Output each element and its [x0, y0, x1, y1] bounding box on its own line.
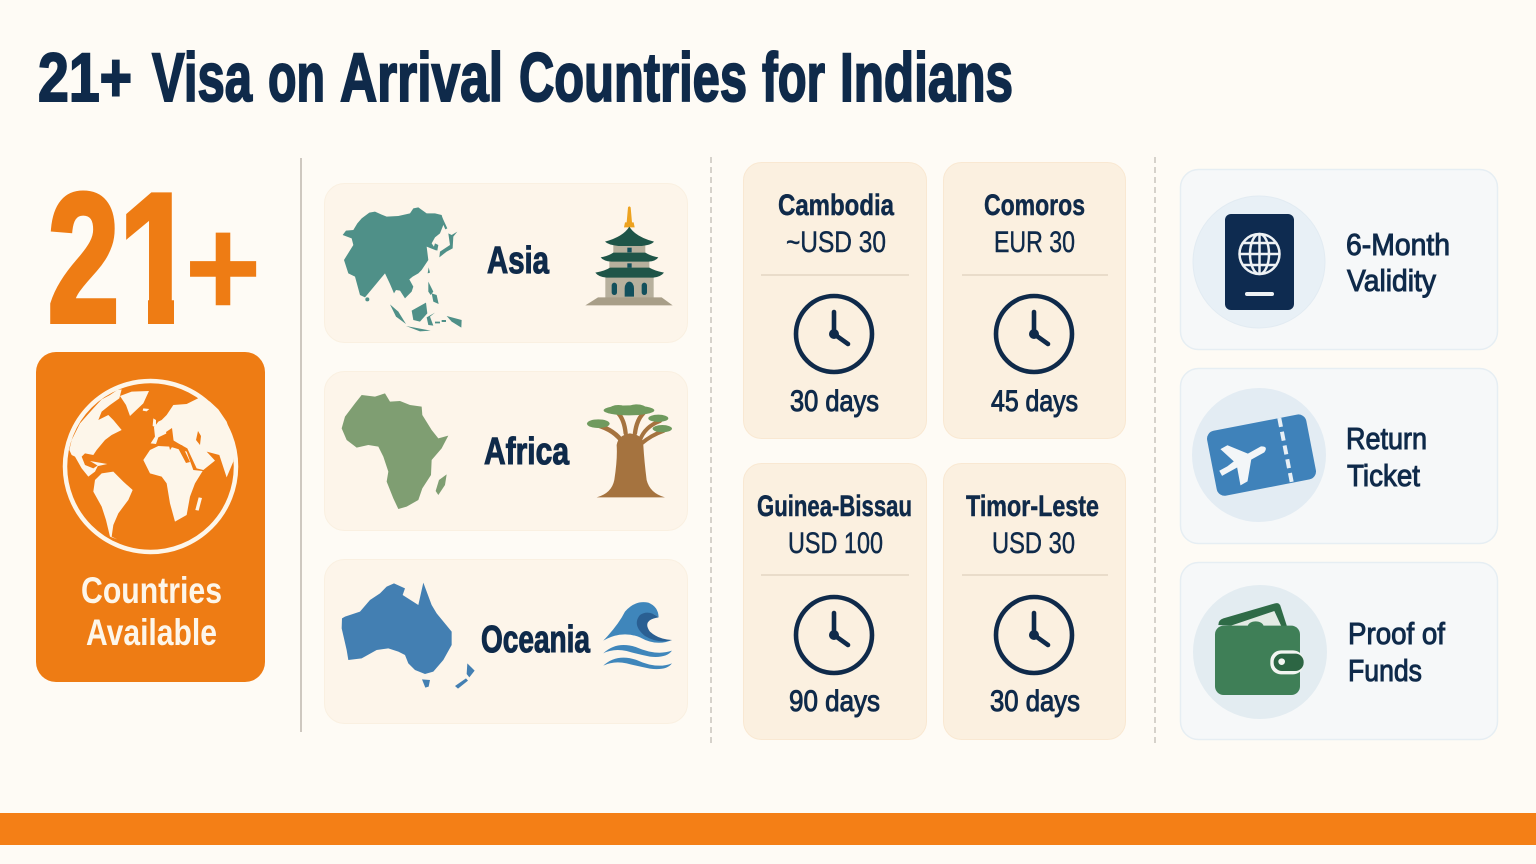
icon: baobab tree: [587, 404, 672, 497]
icon: plane ticket: [1206, 413, 1317, 497]
title: 21+: [38, 39, 132, 116]
title: Visa: [152, 39, 252, 116]
title: for: [762, 39, 825, 116]
panel: Comoros: [944, 162, 1126, 438]
panel: 6-month validity: [1180, 170, 1498, 350]
icon: wallet: [1215, 603, 1304, 695]
label: Return Ticket: [1346, 421, 1427, 493]
label: Proof of Funds: Proof of: [1348, 616, 1445, 651]
label: countries available: Available: [86, 612, 217, 653]
icon: clock: [996, 296, 1072, 372]
name and fee: USD 30: [992, 527, 1075, 560]
name and fee: Comoros: [984, 189, 1085, 222]
name and fee: [966, 490, 1099, 560]
icon: globe: [65, 381, 236, 552]
name and fee: USD 100: [788, 527, 883, 560]
icon: wave: [603, 602, 672, 669]
big number: 21+: 1: [119, 154, 196, 360]
label: Return Ticket: Return: [1346, 421, 1427, 456]
duration: 45 days: [991, 385, 1078, 418]
panel: Cambodia: [744, 162, 926, 438]
title: Indians: [840, 39, 1013, 116]
label: Oceania: Oceania: [481, 619, 591, 661]
icon: clock: [796, 597, 872, 673]
icon: clock: [796, 296, 872, 372]
label: Proof of Funds: [1348, 616, 1445, 688]
title: on: [268, 39, 325, 116]
label: countries available: Countries: [81, 570, 222, 611]
duration: 90 days: [789, 685, 880, 718]
name and fee: EUR 30: [994, 226, 1075, 259]
duration: 30 days: [990, 685, 1080, 718]
icon: clock: [996, 597, 1072, 673]
name and fee: ~USD 30: [786, 226, 886, 259]
name and fee: Timor-Leste: [966, 490, 1099, 523]
title: [38, 39, 1013, 116]
panel: return ticket: [1180, 368, 1498, 544]
big number: 21+: +: [184, 188, 262, 348]
label: 6-Month Validity: 6-Month: [1346, 227, 1450, 262]
panel: Asia: [324, 184, 688, 342]
label: Asia: Asia: [487, 240, 550, 282]
label: 6-Month Validity: [1346, 227, 1450, 298]
name and fee: [778, 189, 894, 259]
name and fee: [757, 490, 912, 560]
title: Countries: [519, 39, 747, 116]
panel: Oceania: [324, 560, 688, 724]
name and fee: Cambodia: [778, 189, 894, 222]
big number: 21+: 2: [48, 154, 120, 360]
title: Arrival: [340, 39, 503, 116]
panel: Africa: [324, 372, 688, 530]
icon: Africa map: [342, 393, 448, 509]
panel: countries available: [36, 352, 265, 682]
icon: Asia map: [343, 207, 462, 331]
icon: pagoda: [585, 206, 673, 305]
icon: passport: [1225, 214, 1294, 310]
label: Return Ticket: Ticket: [1347, 458, 1420, 493]
big number: 21+: [48, 154, 262, 360]
panel: proof of funds: [1180, 562, 1498, 740]
panel: Guinea-Bissau: [744, 464, 926, 740]
name and fee: Guinea-Bissau: [757, 490, 912, 523]
footer bar: [0, 813, 1536, 845]
duration: 30 days: [790, 385, 879, 418]
label: Proof of Funds: Funds: [1348, 653, 1422, 688]
name and fee: [984, 189, 1085, 259]
icon: Australia map: [342, 583, 475, 689]
label: countries available: [81, 570, 222, 653]
label: Africa: Africa: [484, 431, 570, 473]
label: 6-Month Validity: Validity: [1347, 263, 1436, 298]
panel: Timor-Leste: [944, 464, 1126, 740]
